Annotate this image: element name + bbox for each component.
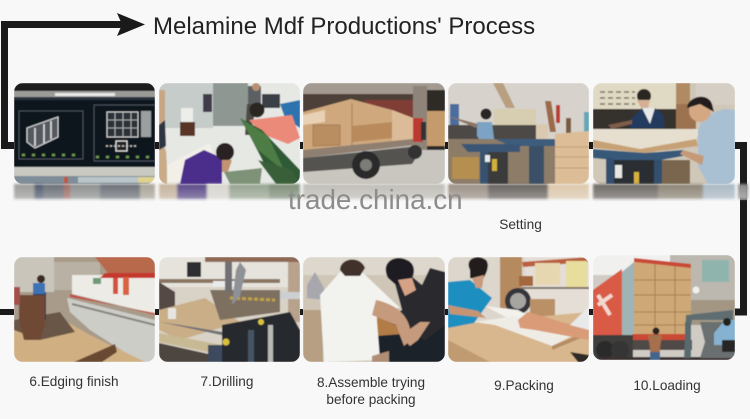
caption: step 9: 9.Packing [494,378,554,393]
photo: setting operator [448,83,589,184]
photo: team reviewing [159,83,300,184]
photo: truck with boards [303,83,445,184]
photo: container loading [593,255,735,360]
photo: assembly trial [303,257,445,362]
connector: lower row [0,309,593,315]
photo: packing [448,257,589,362]
caption: setting: Setting [499,217,542,232]
arrow: into title [4,13,145,146]
caption: step 8: 8.Assemble trying [317,375,425,390]
motion blur band [14,184,748,199]
caption: step 7: 7.Drilling [201,374,253,389]
watermark: trade.china.cn [288,184,463,215]
caption: step 8: before packing [326,392,416,407]
connector: upper row and right side [155,146,744,312]
caption: step 6: 6.Edging finish [29,374,119,389]
blur band fade [0,184,750,200]
photo: CAD drawing [14,83,164,184]
caption: step 10: 10.Loading [633,378,701,393]
title: Melamine Mdf Productions' Process [153,13,535,40]
photo: drilling machine [159,257,300,362]
photo: edging machine [14,257,155,362]
photo: setting table [593,83,735,184]
